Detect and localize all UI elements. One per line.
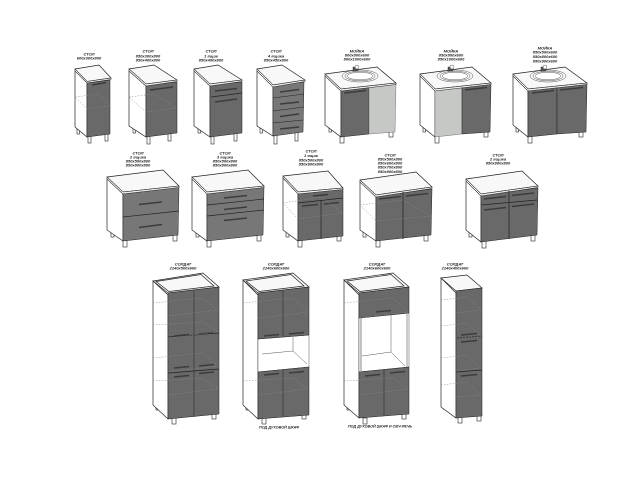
cabinet 8: two doors: 850х500х800 bbox=[378, 156, 403, 162]
cabinet 5: two drawers: СТОЛ bbox=[133, 150, 144, 156]
cabinet 7: one drawer and two doors: СТОЛ bbox=[306, 148, 317, 154]
cabinet 8: two doors: 850х700х800 bbox=[378, 164, 403, 170]
cabinet 6: three drawers bbox=[192, 150, 264, 247]
cabinet 1: narrow door bbox=[75, 52, 111, 143]
cabinet 5: two drawers bbox=[107, 150, 179, 247]
caption: oven and microwave cabinet: ПОД ДУХОВОЙ ШКАФ И СВЧ-ПЕЧЬ bbox=[348, 424, 412, 428]
cabinet 5: two drawers: 2 ящика bbox=[129, 154, 147, 160]
cabinet 9: two drawers and two doors: СТОЛ bbox=[493, 152, 504, 158]
cabinet 4: four drawers: 850х450х800 bbox=[264, 58, 289, 62]
cabinet 8: two doors: 850х600х800 bbox=[378, 160, 403, 166]
tall cabinet 4: narrow three doors bbox=[441, 262, 482, 423]
cabinet 6: three drawers: СТОЛ bbox=[220, 150, 231, 156]
cabinet 2: single door: 850х400х800 bbox=[136, 58, 161, 62]
cabinet 3: one drawer and door: СТОЛ bbox=[206, 48, 217, 54]
tall cabinet 4: narrow three doors: 2140х400х600 bbox=[441, 266, 469, 270]
cabinet 8: two doors: СТОЛ bbox=[385, 152, 396, 158]
cabinet 7: one drawer and two doors bbox=[283, 148, 343, 247]
cabinet 5: two drawers: 850х800х800 bbox=[126, 162, 151, 168]
cabinet 6: three drawers: 850х500х800 bbox=[213, 158, 238, 164]
sink cabinet 3: two dark doors: 850х900х600 bbox=[533, 58, 558, 64]
sink cabinet 3: two dark doors: 850х800х600 bbox=[533, 54, 558, 59]
cabinet 7: one drawer and two doors: 850х800х800 bbox=[299, 162, 324, 166]
cabinet 3: one drawer and door bbox=[194, 48, 242, 144]
tall cabinet 3: oven and microwave niche: СОЛДАТ bbox=[369, 262, 386, 266]
cabinet 6: three drawers: 3 ящика bbox=[217, 154, 234, 160]
cabinet 3: one drawer and door: 850х400х800 bbox=[199, 58, 224, 62]
cabinet 2: single door bbox=[129, 48, 177, 144]
tall cabinet 2: oven niche: 2140х600х600 bbox=[262, 266, 290, 270]
cabinet 3: one drawer and door: 1 ящик bbox=[204, 54, 219, 58]
sink cabinet 2: light door left, dark door right: МОЙКА bbox=[444, 48, 458, 54]
sink cabinet 2: light door left, dark door right bbox=[420, 48, 491, 143]
cabinet 2: single door: 850х300х800 bbox=[136, 54, 161, 58]
cabinet 6: three drawers: 850х800х800 bbox=[213, 162, 238, 168]
sink cabinet 1: dark door left, light door right: 800х1000х600 bbox=[344, 56, 371, 62]
cabinet 4: four drawers bbox=[257, 48, 305, 144]
tall cabinet 1: six doors bbox=[153, 262, 219, 424]
tall cabinet 3: oven and microwave niche bbox=[344, 262, 412, 428]
cabinet 2: single door: СТОЛ bbox=[143, 48, 154, 54]
cabinet 9: two drawers and two doors: 850х800х800 bbox=[486, 160, 511, 166]
tall cabinet 1: six doors: 2140х500х600 bbox=[169, 266, 197, 270]
tall cabinet 4: narrow three doors: СОЛДАТ bbox=[447, 262, 464, 266]
sink cabinet 3: two dark doors: 850х500х600 bbox=[533, 50, 558, 54]
cabinet 9: two drawers and two doors bbox=[466, 152, 538, 248]
cabinet 1: narrow door: СТОЛ bbox=[84, 52, 95, 56]
sink cabinet 1: dark door left, light door right bbox=[325, 48, 396, 143]
tall cabinet 3: oven and microwave niche: 2140х600х600 bbox=[363, 266, 391, 270]
sink cabinet 2: light door left, dark door right: 850х1000х600 bbox=[438, 56, 465, 62]
sink cabinet 1: dark door left, light door right: МОЙКА bbox=[350, 48, 364, 54]
sink cabinet 2: light door left, dark door right: 850х800х600 bbox=[439, 52, 464, 58]
sink cabinet 1: dark door left, light door right: 800х800х600 bbox=[345, 52, 370, 58]
sink cabinet 3: two dark doors: МОЙКА bbox=[538, 46, 552, 50]
cabinet 8: two doors bbox=[360, 152, 432, 247]
tall cabinet 2: oven niche bbox=[243, 262, 309, 430]
cabinet 7: one drawer and two doors: 850х500х800 bbox=[299, 158, 324, 162]
cabinet 4: four drawers: 4 ящика bbox=[267, 54, 285, 58]
cabinet 1: narrow door: 600х300х800 bbox=[77, 56, 102, 60]
sink cabinet 3: two dark doors bbox=[513, 46, 587, 143]
cabinet 4: four drawers: СТОЛ bbox=[271, 48, 282, 54]
cabinet 7: one drawer and two doors: 1 ящик bbox=[304, 153, 319, 158]
cabinet 9: two drawers and two doors: 2 ящика bbox=[489, 156, 507, 162]
cabinet 8: two doors: 850х800х800 bbox=[378, 169, 403, 174]
cabinet 5: two drawers: 850х500х800 bbox=[126, 158, 151, 164]
tall cabinet 1: six doors: СОЛДАТ bbox=[175, 262, 192, 266]
tall cabinet 2: oven niche: СОЛДАТ bbox=[268, 262, 285, 266]
caption: oven cabinet: ПОД ДУХОВОЙ ШКАФ bbox=[259, 426, 299, 430]
